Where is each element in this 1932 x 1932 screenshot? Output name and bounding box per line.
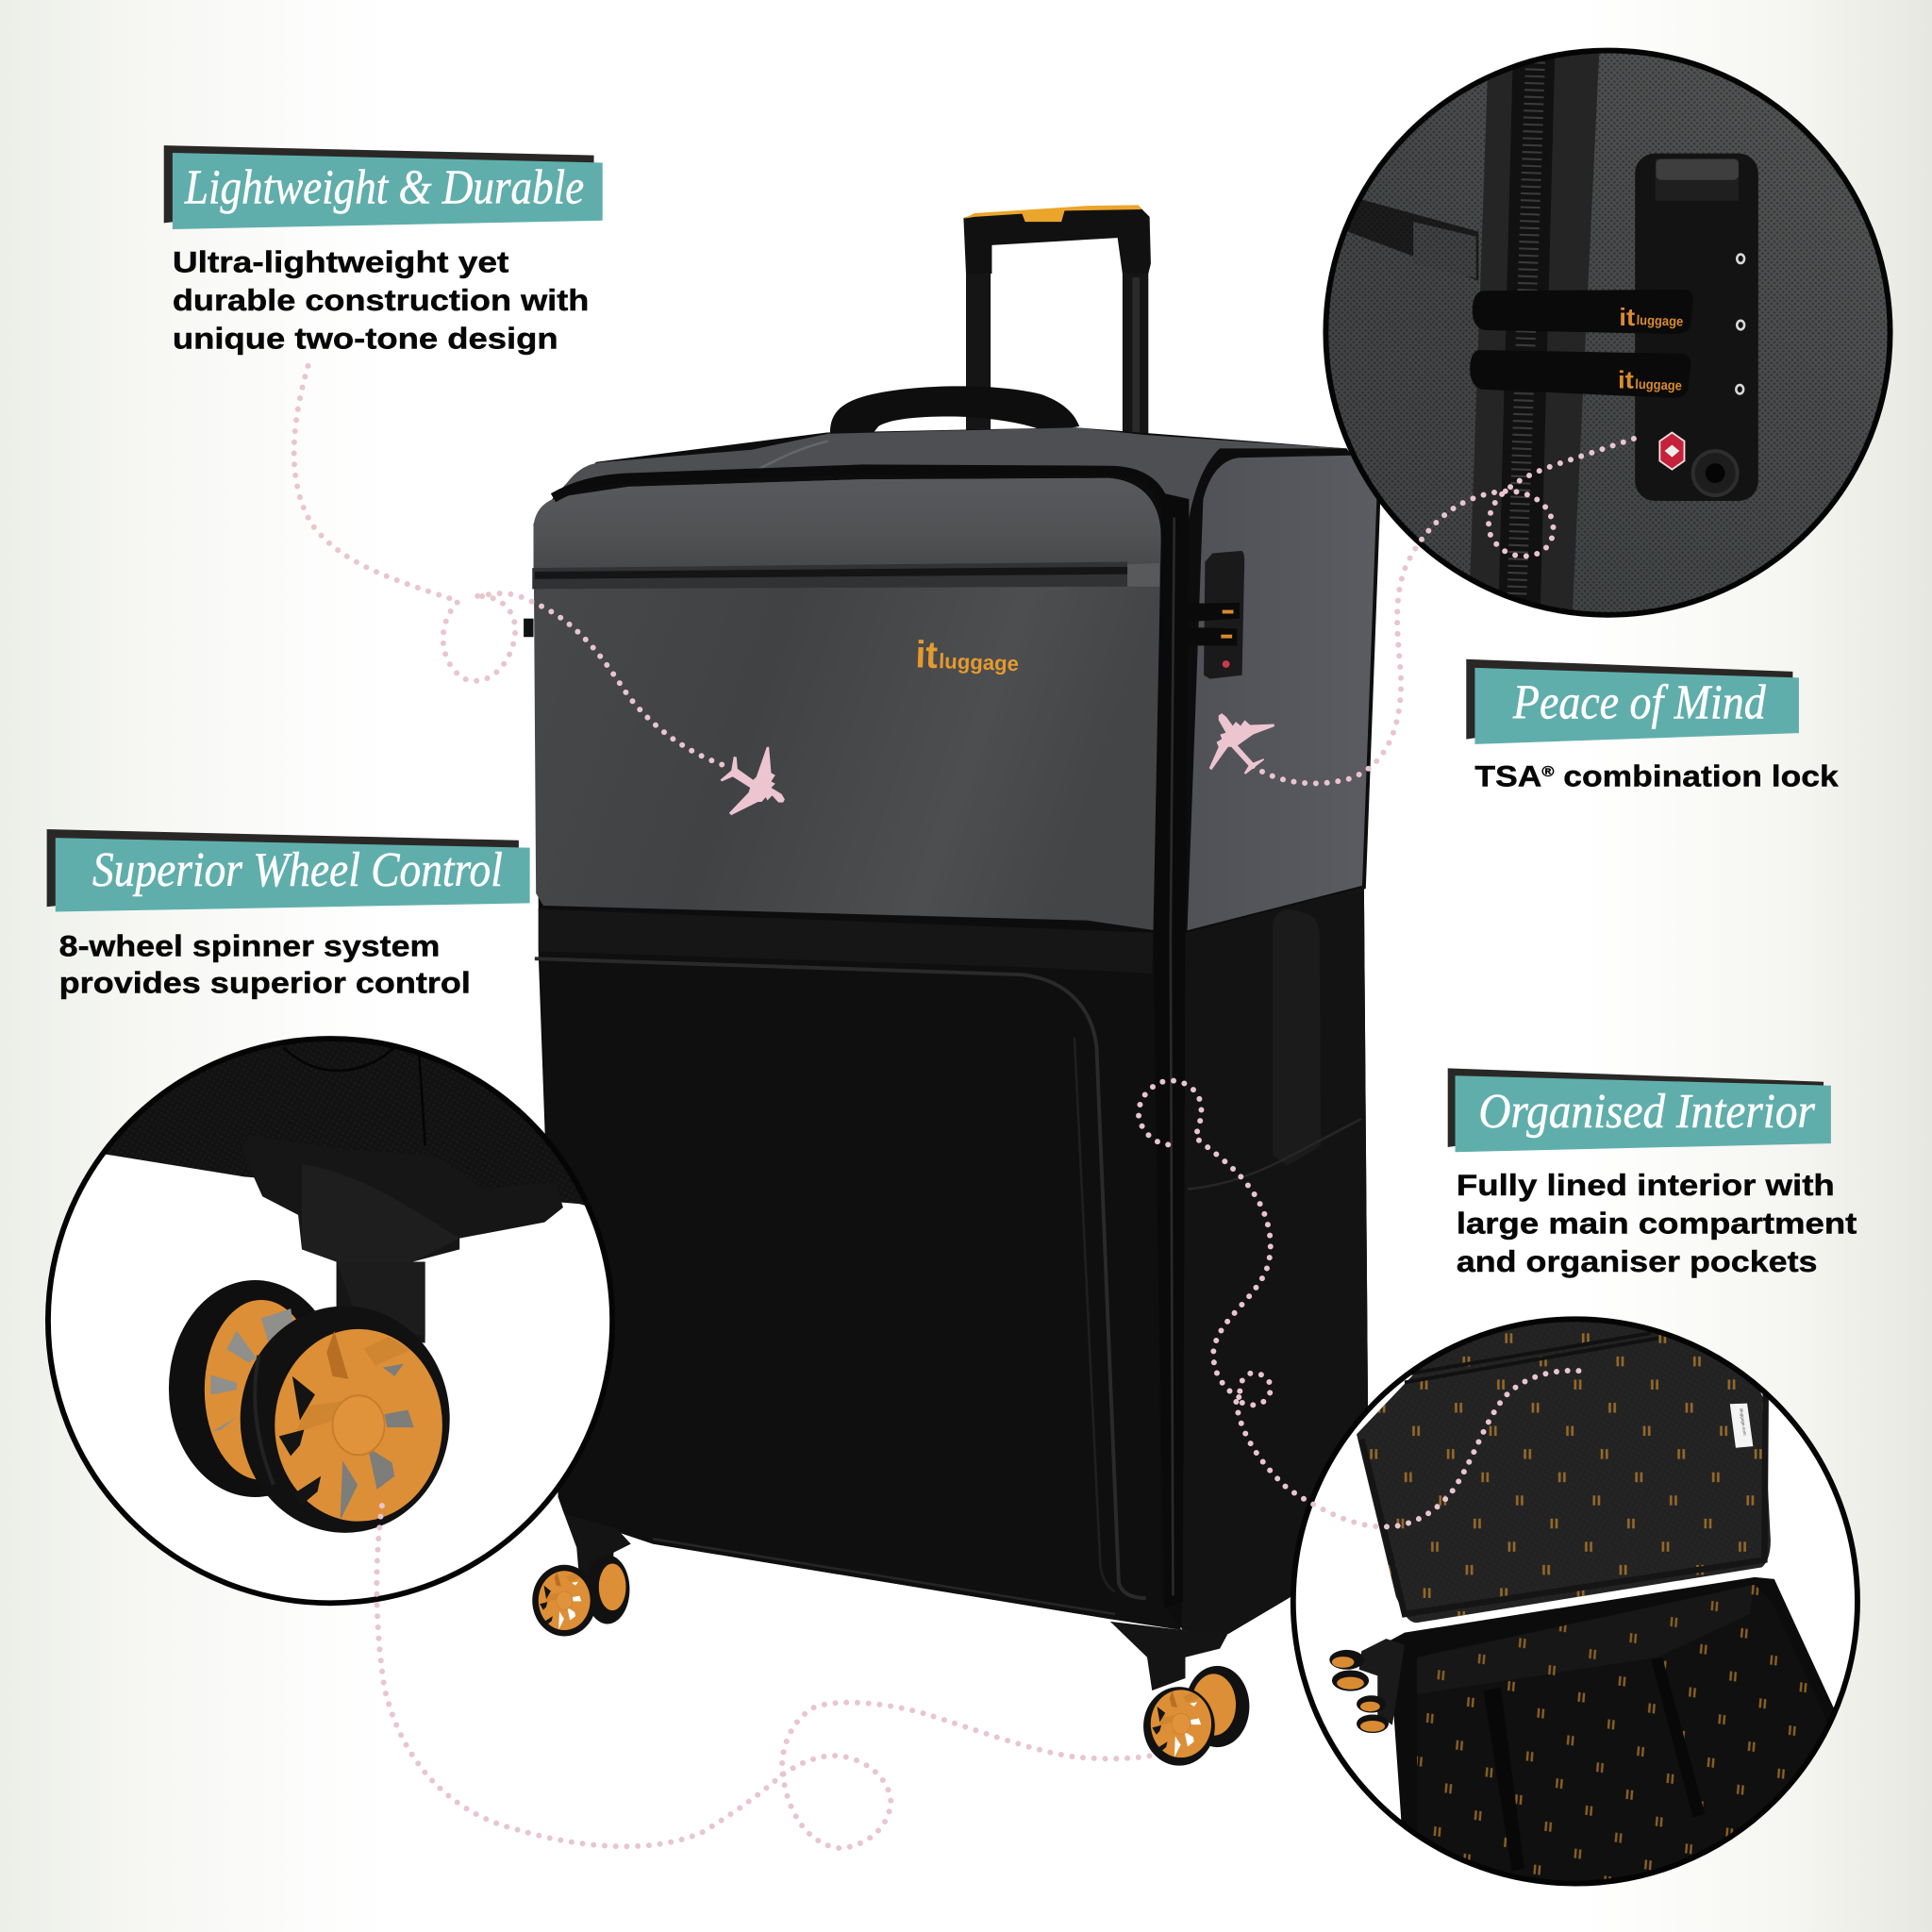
- lid label: [1730, 1404, 1753, 1448]
- small wheels: [1329, 1639, 1405, 1733]
- description: ®: [1541, 764, 1555, 780]
- description: durable construction with: [173, 284, 589, 317]
- zipper tab bottom: it: [1618, 365, 1634, 393]
- panel: lock close-up circle: [1325, 51, 1890, 616]
- description: TSA: [1474, 759, 1534, 792]
- callout: superior wheel control: [47, 829, 530, 1000]
- front panel top band: [534, 478, 1162, 569]
- icon: plane on side: [1209, 713, 1274, 774]
- callout: organised interior: [1448, 1068, 1857, 1278]
- right caster: [1110, 1622, 1249, 1766]
- top zipper band: [553, 470, 1164, 506]
- description: Fully lined interior with: [1457, 1169, 1835, 1202]
- dotted trail: lightweight to plane: [294, 366, 727, 766]
- body silhouette: [534, 427, 1379, 1634]
- fabric base of suitcase: [106, 1041, 585, 1206]
- front upper panel: [534, 478, 1162, 930]
- front wheel: [241, 1306, 450, 1533]
- panel: interior close-up circle: [1293, 1306, 1860, 1885]
- lower shelf: [539, 909, 1154, 974]
- heading ribbon: [1466, 659, 1799, 744]
- description: provides superior control: [59, 967, 471, 1000]
- combination dials: [1736, 255, 1744, 393]
- side handle: [1273, 909, 1321, 1166]
- side TSA lock small: [1179, 551, 1244, 679]
- side panel grey: [1185, 454, 1379, 933]
- heading ribbon: [1448, 1068, 1831, 1152]
- lower front panel: [539, 908, 1182, 1630]
- heading ribbon: Organised Interior: [1478, 1084, 1816, 1139]
- dotted trail: wheel close-up to caster: [376, 1506, 1156, 1848]
- dotted trail: lock to plane: [1249, 439, 1634, 783]
- TSA diamond: [1659, 432, 1684, 470]
- description: unique two-tone design: [173, 323, 558, 356]
- telescopic handle: [963, 205, 1151, 438]
- main zipper band: [1469, 51, 1599, 616]
- lid label: itluggage.com: [1739, 1407, 1747, 1436]
- description: [173, 246, 589, 356]
- description: 8-wheel spinner system: [59, 930, 440, 963]
- top surface: [553, 427, 1347, 542]
- logo: luggage: [939, 649, 1019, 675]
- heading ribbon: Peace of Mind: [1512, 675, 1766, 729]
- rear wheel: [168, 1280, 315, 1497]
- logo: [915, 632, 1020, 679]
- lower pocket edge: [1074, 1038, 1115, 1592]
- left caster: [532, 1514, 631, 1637]
- description: combination lock: [1554, 759, 1839, 792]
- description: and organiser pockets: [1457, 1245, 1818, 1278]
- zipper tab top: luggage: [1636, 313, 1683, 330]
- zipper tab bottom: [1470, 350, 1690, 398]
- lower pocket zipper: [535, 958, 1146, 1598]
- key cylinder: [1693, 451, 1738, 495]
- side panel black: [1182, 887, 1369, 1634]
- top carry handle: [830, 386, 1079, 439]
- description: [1457, 1169, 1857, 1278]
- icon: plane on front: [720, 747, 785, 815]
- description: large main compartment: [1457, 1207, 1857, 1240]
- pocket zipper close-up: [1348, 197, 1478, 281]
- TSA lock body: [1635, 154, 1758, 501]
- heading ribbon: [164, 145, 603, 229]
- callout: peace of mind: [1466, 659, 1839, 792]
- dotted trail: suitcase side to interior: [1139, 1080, 1586, 1526]
- zipper tab top: [1473, 290, 1693, 334]
- lower compartment: [1389, 1577, 1860, 1885]
- central zipper gutter: [1154, 492, 1189, 1607]
- heading ribbon: Lightweight & Durable: [184, 160, 584, 215]
- suitcase: [524, 205, 1379, 1766]
- straps: [1484, 1658, 1705, 1872]
- caster plate and stem: [254, 1164, 563, 1343]
- heading ribbon: Superior Wheel Control: [92, 842, 503, 897]
- description: Ultra-lightweight yet: [173, 246, 509, 279]
- lower side flap seam: [1188, 1119, 1361, 1189]
- logo: it: [915, 632, 939, 676]
- open lid: [1357, 1306, 1771, 1623]
- panel: wheel close-up circle: [48, 1038, 616, 1603]
- zipper tab top: it: [1619, 303, 1636, 331]
- callout: lightweight and durable: [164, 145, 603, 356]
- description: [59, 930, 471, 1000]
- zipper tab bottom: luggage: [1635, 377, 1682, 394]
- upper pocket zipper: [524, 562, 1159, 637]
- bottom seam: [653, 1539, 1115, 1614]
- top seam: [758, 441, 828, 470]
- heading ribbon: [47, 829, 530, 912]
